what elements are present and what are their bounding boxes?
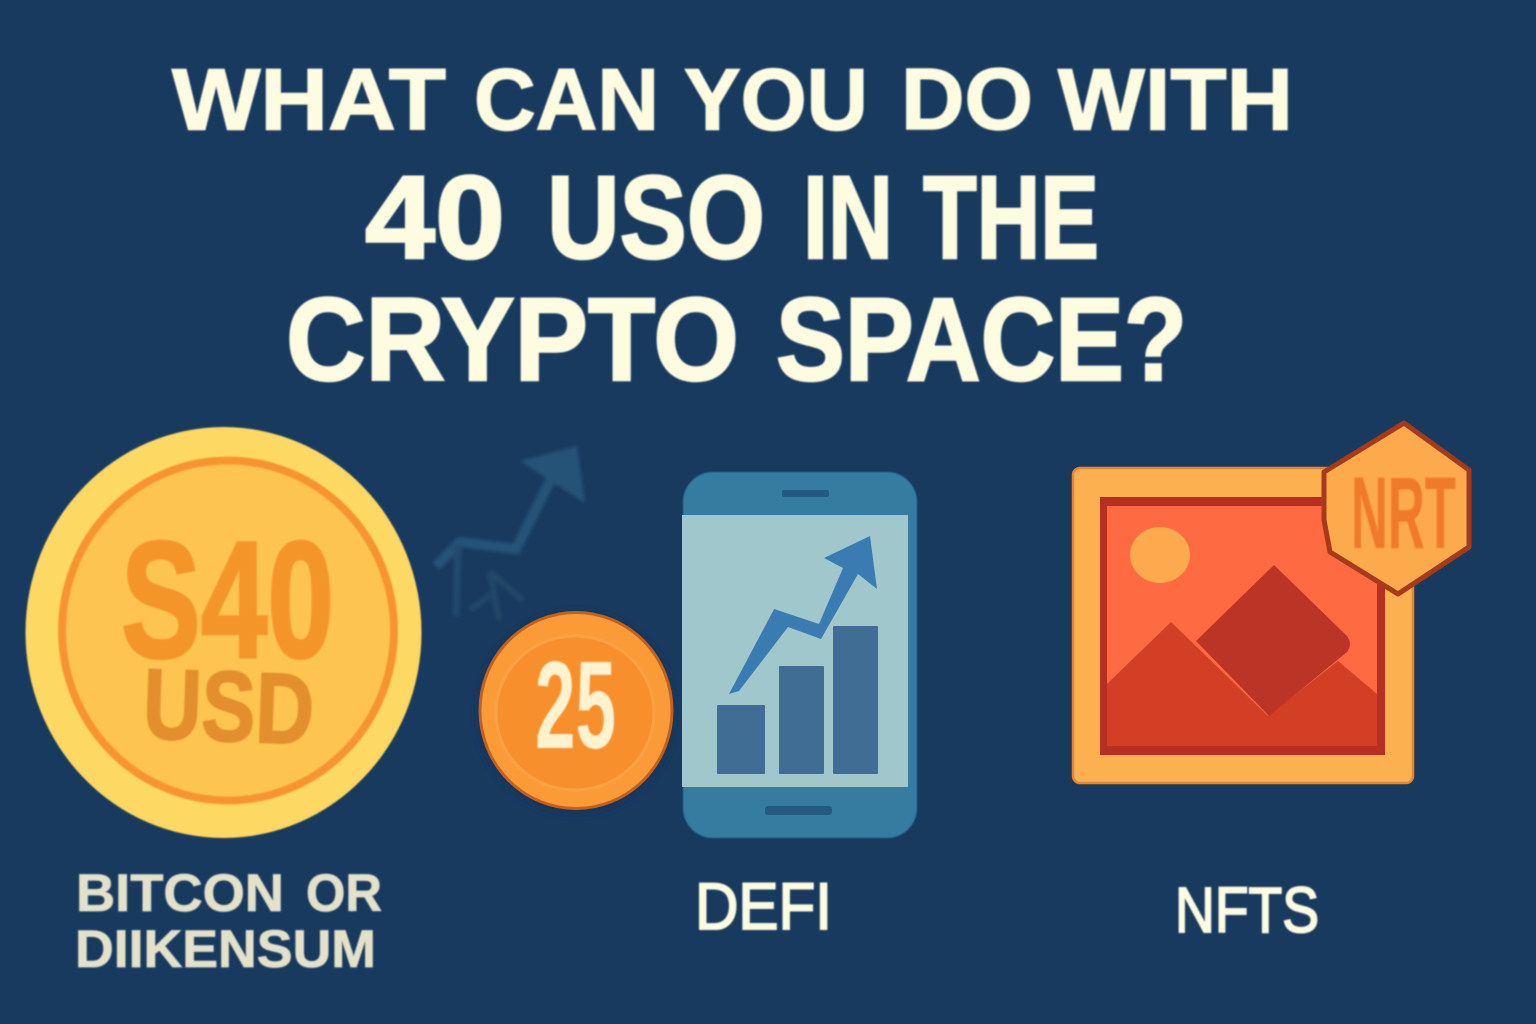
title: SPACE? (776, 274, 1187, 406)
icon: faded growth arrow (436, 446, 585, 620)
label: DeFi: DEFI (695, 869, 832, 943)
phone body (683, 472, 917, 838)
label: bitcoin or ethereum (75, 864, 382, 979)
icon: large 40 USD coin: USD (141, 648, 316, 766)
title (172, 51, 1293, 406)
title: YOU (684, 52, 868, 148)
icon: NRT hexagon badge (1324, 423, 1469, 594)
title: 40 (365, 152, 505, 284)
title: WHAT (172, 52, 446, 148)
label: bitcoin or ethereum: BITCON (76, 864, 284, 923)
icon: small 25 coin: 25 (535, 637, 616, 775)
icon: phone with rising chart (682, 472, 917, 838)
picture frame (1073, 468, 1413, 783)
title: USO (547, 152, 765, 284)
diamond peak (1196, 565, 1350, 716)
artwork background (1100, 497, 1385, 755)
mountains (1107, 622, 1377, 746)
title: CRYPTO (286, 274, 739, 406)
title: THE (923, 152, 1099, 284)
title: WITH (1058, 52, 1293, 148)
label: bitcoin or ethereum: OR (306, 864, 382, 923)
icon: large 40 USD coin (26, 427, 422, 838)
icon: large 40 USD coin: S40 (121, 508, 334, 693)
bottom button (765, 806, 832, 815)
icon: small 25 coin (479, 612, 673, 812)
title: IN (803, 152, 893, 284)
label: NFTs: NFTS (1175, 874, 1319, 946)
top speaker (782, 490, 829, 497)
sun (1130, 527, 1190, 583)
label: bitcoin or ethereum: DIIKENSUM (75, 920, 376, 979)
icon: NFT framed artwork (1073, 468, 1413, 783)
title: DO (901, 51, 1033, 148)
rising arrow (729, 536, 877, 694)
title: CAN (474, 52, 659, 148)
bar chart (717, 626, 878, 774)
phone screen (682, 515, 908, 787)
